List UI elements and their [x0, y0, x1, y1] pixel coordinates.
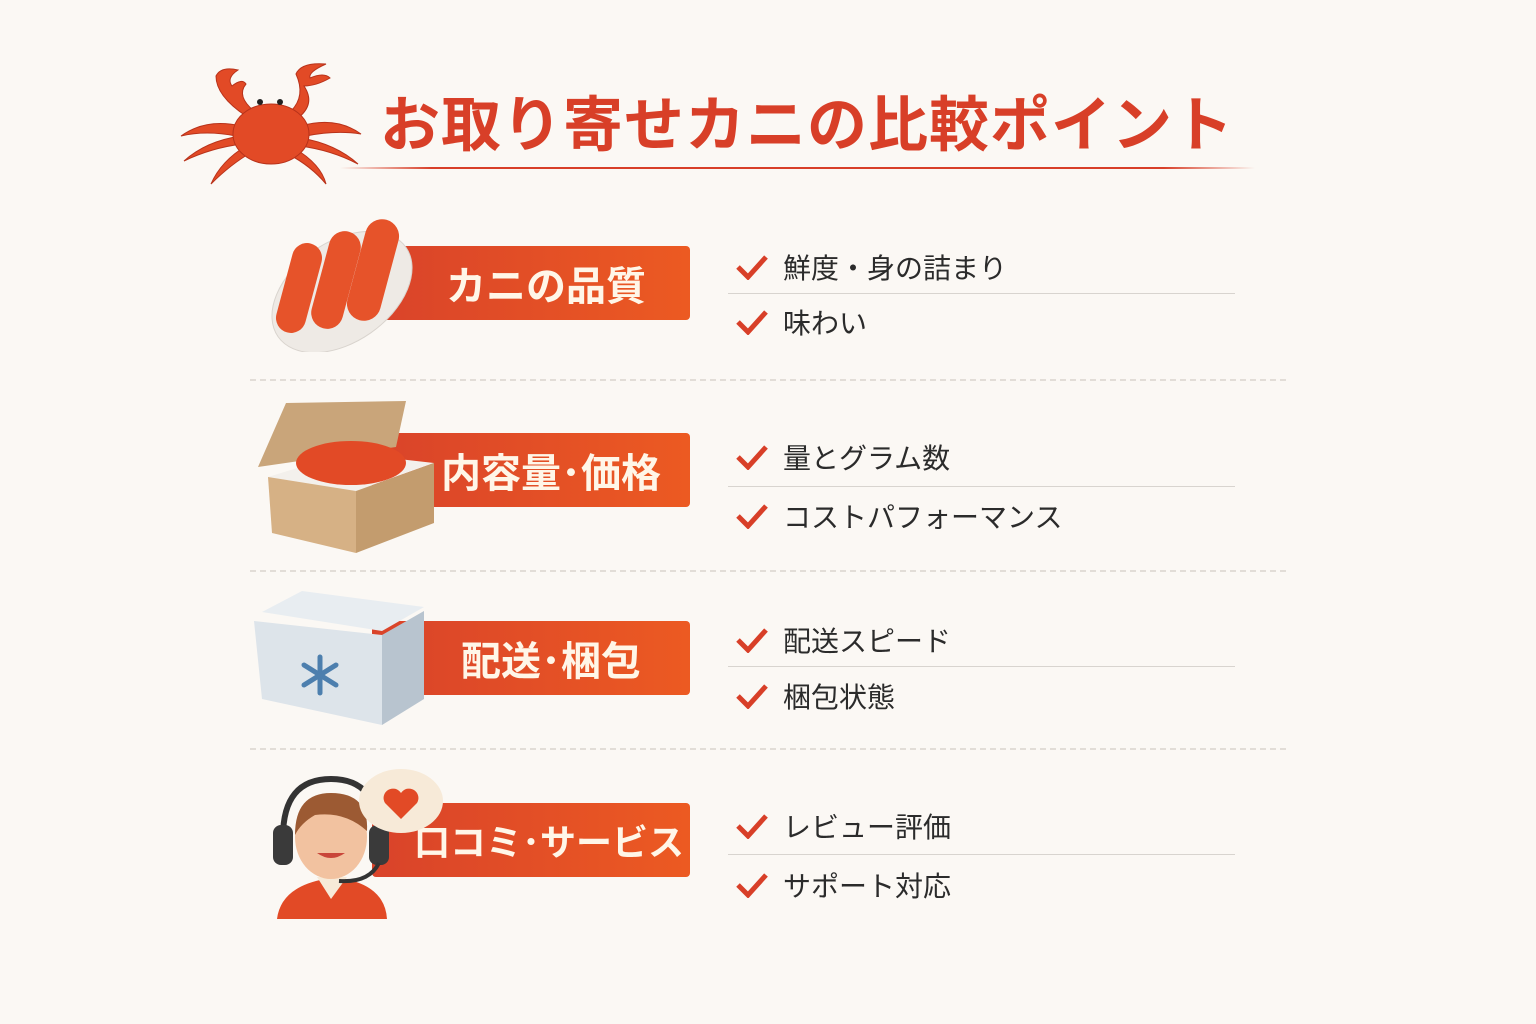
panel: quality [272, 219, 1235, 352]
check items: reviews: サポート対応 [783, 871, 951, 902]
icon: support agent with heart bubble [273, 769, 443, 919]
icon: crab legs on plate [272, 219, 413, 352]
banner: volume & price [372, 433, 690, 507]
banner: shipping: 配送･梱包 [461, 640, 641, 684]
panel: shipping & packing [254, 591, 1235, 725]
banner: quality: カニの品質 [446, 265, 646, 309]
check items: shipping: 配送スピード [783, 626, 951, 657]
banner: shipping [372, 621, 690, 695]
check items: reviews [728, 812, 1235, 902]
check items: reviews: レビュー評価 [783, 812, 951, 843]
check items: quality: 味わい [783, 308, 867, 339]
banner: quality [372, 246, 690, 320]
banner: reviews: 口コミ･サービス [414, 822, 684, 863]
icon: styrofoam cooler box [254, 591, 424, 725]
icon: crab [180, 63, 362, 184]
icon: crab box [258, 401, 434, 553]
banner: reviews [372, 803, 690, 877]
panel: volume & price [258, 401, 1235, 553]
title: お取り寄せカニの比較ポイント [380, 92, 1234, 159]
check items: quality: 鮮度・身の詰まり [783, 253, 1007, 284]
check items: volume & price: コストパフォーマンス [783, 502, 1062, 533]
check items: volume & price [728, 443, 1235, 533]
check items: shipping: 梱包状態 [783, 682, 895, 713]
check items: volume & price: 量とグラム数 [783, 443, 950, 474]
check items: quality [728, 253, 1235, 339]
check items: shipping [728, 626, 1235, 713]
panel: reviews & service [273, 769, 1235, 919]
banner: volume & price: 内容量･価格 [441, 452, 661, 496]
